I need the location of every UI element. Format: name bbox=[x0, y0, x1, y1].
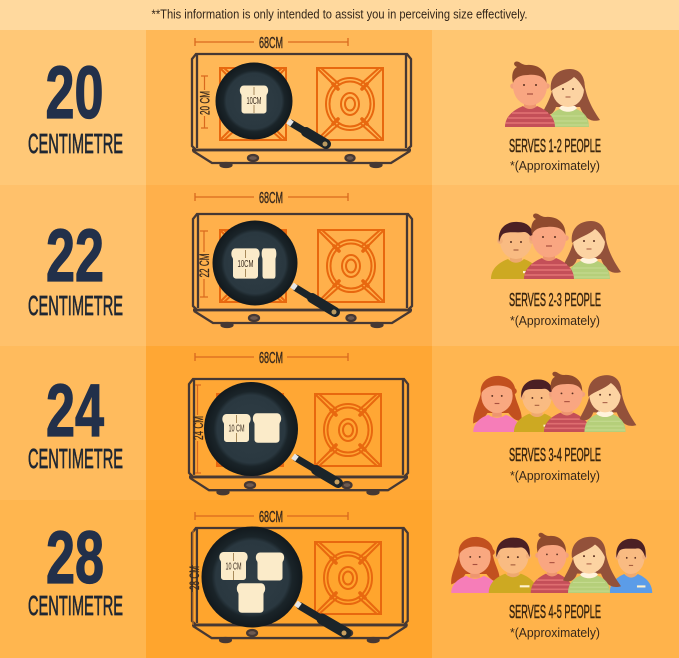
size heading 20 bbox=[28, 51, 123, 159]
serving text: *(Approximately) bbox=[510, 313, 600, 328]
stove with 24 cm pan: 68CM bbox=[259, 350, 283, 367]
size heading 24 bbox=[28, 369, 123, 474]
stove with 20 cm pan: 68CM bbox=[259, 35, 283, 52]
people group: serves 2-3 bbox=[491, 214, 621, 279]
frying pan: 10 CM bbox=[228, 424, 244, 434]
size heading 24: CENTIMETRE bbox=[28, 443, 123, 474]
stove with 22 cm pan: 68CM bbox=[259, 190, 283, 207]
size heading 22: 22 bbox=[46, 214, 104, 297]
stove with 24 cm pan bbox=[189, 350, 408, 494]
stove with 22 cm pan: 22 CM bbox=[197, 254, 212, 278]
frying pan bbox=[212, 220, 336, 314]
size heading 28: CENTIMETRE bbox=[28, 590, 123, 621]
size heading 20: CENTIMETRE bbox=[28, 128, 123, 159]
size heading 28: 28 bbox=[46, 516, 104, 599]
people group: serves 3-4 bbox=[473, 372, 636, 432]
stove with 24 cm pan: 24 CM bbox=[191, 416, 206, 440]
row 4: 28 centimetre bbox=[0, 500, 679, 658]
people group: serves 1-2 bbox=[505, 62, 600, 127]
stove with 28 cm pan bbox=[187, 509, 408, 642]
frying pan bbox=[202, 526, 347, 636]
serving text bbox=[509, 444, 601, 483]
frying pan: 10CM bbox=[246, 96, 262, 107]
size heading 28 bbox=[28, 516, 123, 621]
serving text bbox=[509, 289, 601, 328]
disclaimer text: **This information is only intended to assist you in perceiving size effectively. bbox=[152, 8, 528, 22]
frying pan: 10CM bbox=[238, 259, 254, 270]
size heading 20: 20 bbox=[46, 51, 104, 134]
top disclaimer banner bbox=[0, 0, 679, 30]
people group: serves 4-5 bbox=[451, 533, 652, 593]
serving text: *(Approximately) bbox=[510, 468, 600, 483]
serving text: *(Approximately) bbox=[510, 625, 600, 640]
stove with 22 cm pan bbox=[193, 190, 412, 327]
stove with 20 cm pan: 20 CM bbox=[198, 91, 212, 115]
stove with 28 cm pan: 68CM bbox=[259, 509, 283, 526]
frying pan: 10 CM bbox=[226, 562, 242, 572]
size heading 24: 24 bbox=[46, 369, 104, 452]
row 2: 22 centimetre bbox=[0, 185, 679, 346]
frying pan bbox=[216, 62, 328, 146]
size heading 22: CENTIMETRE bbox=[28, 290, 123, 321]
serving text bbox=[509, 601, 601, 640]
serving text: *(Approximately) bbox=[510, 158, 600, 173]
row 1: 20 centimetre bbox=[0, 30, 679, 185]
serving text bbox=[509, 135, 601, 173]
frying pan bbox=[204, 382, 340, 484]
row 3: 24 centimetre bbox=[0, 346, 679, 500]
size heading 22 bbox=[28, 214, 123, 321]
stove with 20 cm pan bbox=[192, 35, 411, 167]
stove with 28 cm pan: 28 CM bbox=[187, 566, 202, 590]
